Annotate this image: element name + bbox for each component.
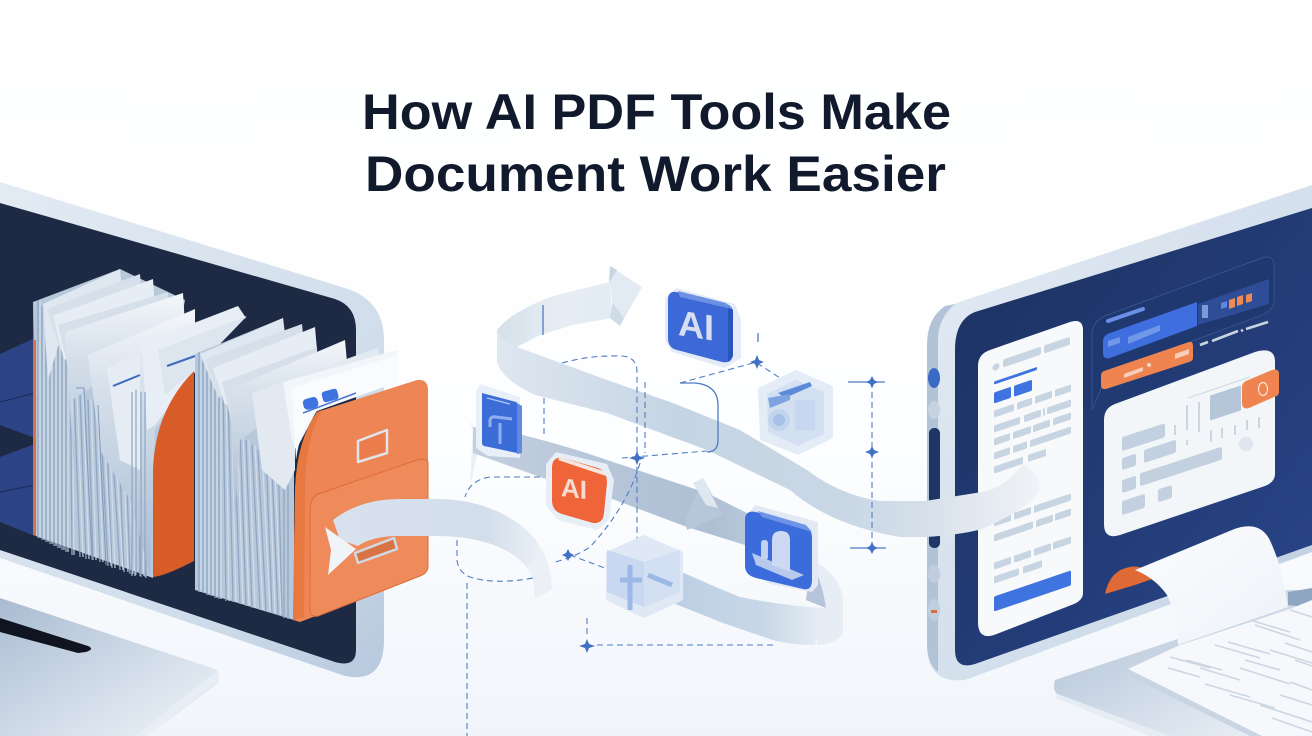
orange divider: [153, 371, 194, 577]
connector node stars: [562, 355, 879, 653]
big ribbon head: [610, 266, 642, 326]
monitor bezel: [0, 182, 384, 677]
document panel: [978, 321, 1083, 636]
file stack: first group: [33, 269, 247, 578]
white detail card: [1104, 350, 1279, 536]
monitor screen: [0, 203, 356, 664]
arrowhead: [325, 527, 356, 575]
right monitor: [927, 185, 1312, 680]
icon: blue AI tile: [665, 288, 741, 368]
folder label handle: [358, 430, 387, 462]
mid band arrowhead: [685, 478, 723, 530]
lower band: [497, 330, 930, 537]
paper sheet with text: [1127, 526, 1312, 736]
curling sheet: [1135, 526, 1288, 645]
title: How AI PDF Tools Make: [362, 84, 951, 140]
ribbon two lower loop: [673, 560, 843, 645]
solid connector lines: [543, 305, 886, 548]
big ribbon tail over screen: [925, 464, 1040, 537]
icon: translucent cube top: [758, 370, 833, 455]
dark toolbar panel: [1092, 257, 1274, 410]
mid band: [473, 427, 815, 592]
paper text lines: [1168, 610, 1312, 732]
text placeholder bars: [992, 336, 1071, 584]
title: [362, 84, 951, 202]
icon: blue document tile: [476, 384, 522, 458]
icon: orange AI tile: AI: [561, 472, 587, 505]
icon: orange AI tile: [546, 452, 614, 530]
monitor bezel: [927, 185, 1312, 680]
left laptop base: [0, 598, 219, 736]
orange folder: [293, 380, 428, 622]
orange toolbar bar: [1101, 342, 1193, 389]
monitor screen: [955, 208, 1312, 665]
blue toolbar bar: [1103, 302, 1197, 358]
dashed connector lines: [457, 356, 872, 736]
blue action button: [994, 570, 1071, 612]
right laptop base: [1054, 588, 1312, 736]
icon: blue tool tile: [745, 505, 818, 592]
orange card button: [1242, 370, 1279, 408]
folder pull handle: [355, 538, 397, 563]
file stack: second group: [195, 318, 398, 620]
left monitor: [0, 182, 384, 677]
navy storage boxes: [0, 338, 35, 536]
side buttons: [928, 368, 940, 621]
ribbon two (mid band with arrow): [470, 420, 815, 592]
icon: translucent cube bottom: [606, 535, 683, 618]
folder front panel: [310, 459, 428, 616]
title: Document Work Easier: [365, 146, 946, 202]
upper arm: [497, 282, 612, 347]
colored status squares: [1221, 293, 1252, 309]
icon: blue AI tile: AI: [678, 302, 714, 349]
big ribbon arrow: [497, 266, 930, 537]
orange half disc: [1105, 566, 1155, 594]
small ribbon arrow from folder: [325, 499, 552, 598]
